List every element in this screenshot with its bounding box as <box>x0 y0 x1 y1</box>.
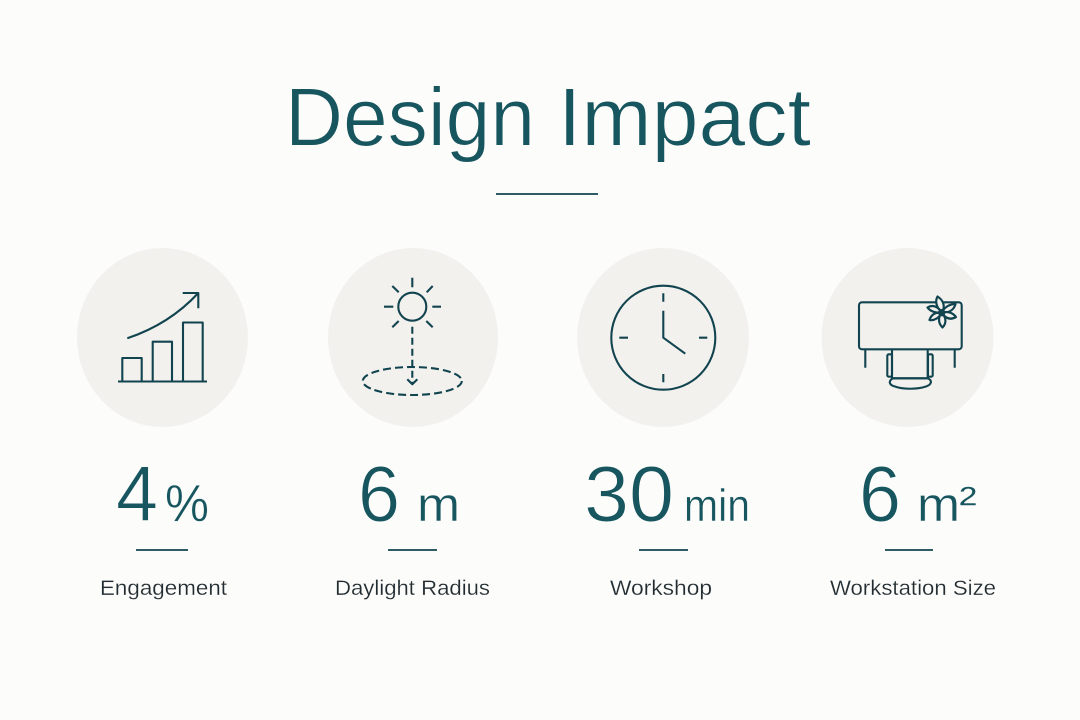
stat: 4%: 4 <box>116 449 158 538</box>
stat: 6 m: 6 <box>358 449 400 538</box>
panel: engagement <box>77 248 248 600</box>
label: workshop: Workshop <box>610 577 712 600</box>
stat: 30 min: min <box>684 480 750 531</box>
panel: daylight radius <box>328 248 498 600</box>
stat: 6 m²: 6 <box>859 449 901 538</box>
icon: desk with plant and chair <box>822 248 994 427</box>
stat: 4%: % <box>165 475 209 533</box>
stat: 6 m: m <box>417 479 460 532</box>
label: workstation size: Workstation Size <box>830 577 996 600</box>
icon: growth chart <box>77 248 248 427</box>
stat: 6 m²: m <box>917 479 960 532</box>
label: engagement: Engagement <box>100 577 227 600</box>
icon: plant <box>928 296 956 328</box>
panel: workstation size <box>822 248 996 600</box>
stat: 6 m² <box>859 449 977 538</box>
icon: clock <box>577 248 749 427</box>
title: Impact <box>558 70 811 164</box>
icon: sun and radius <box>328 248 498 427</box>
stat: 30 min: 30 <box>584 449 674 538</box>
stat: 6 m <box>358 449 460 538</box>
stat: 6 m²: ² <box>959 477 977 528</box>
stat: 4% <box>116 449 209 538</box>
title <box>285 70 811 164</box>
panel: workshop <box>577 248 750 600</box>
stat: 30 min <box>584 449 750 538</box>
title: Design <box>285 70 535 164</box>
label: daylight radius: Daylight Radius <box>335 577 490 600</box>
